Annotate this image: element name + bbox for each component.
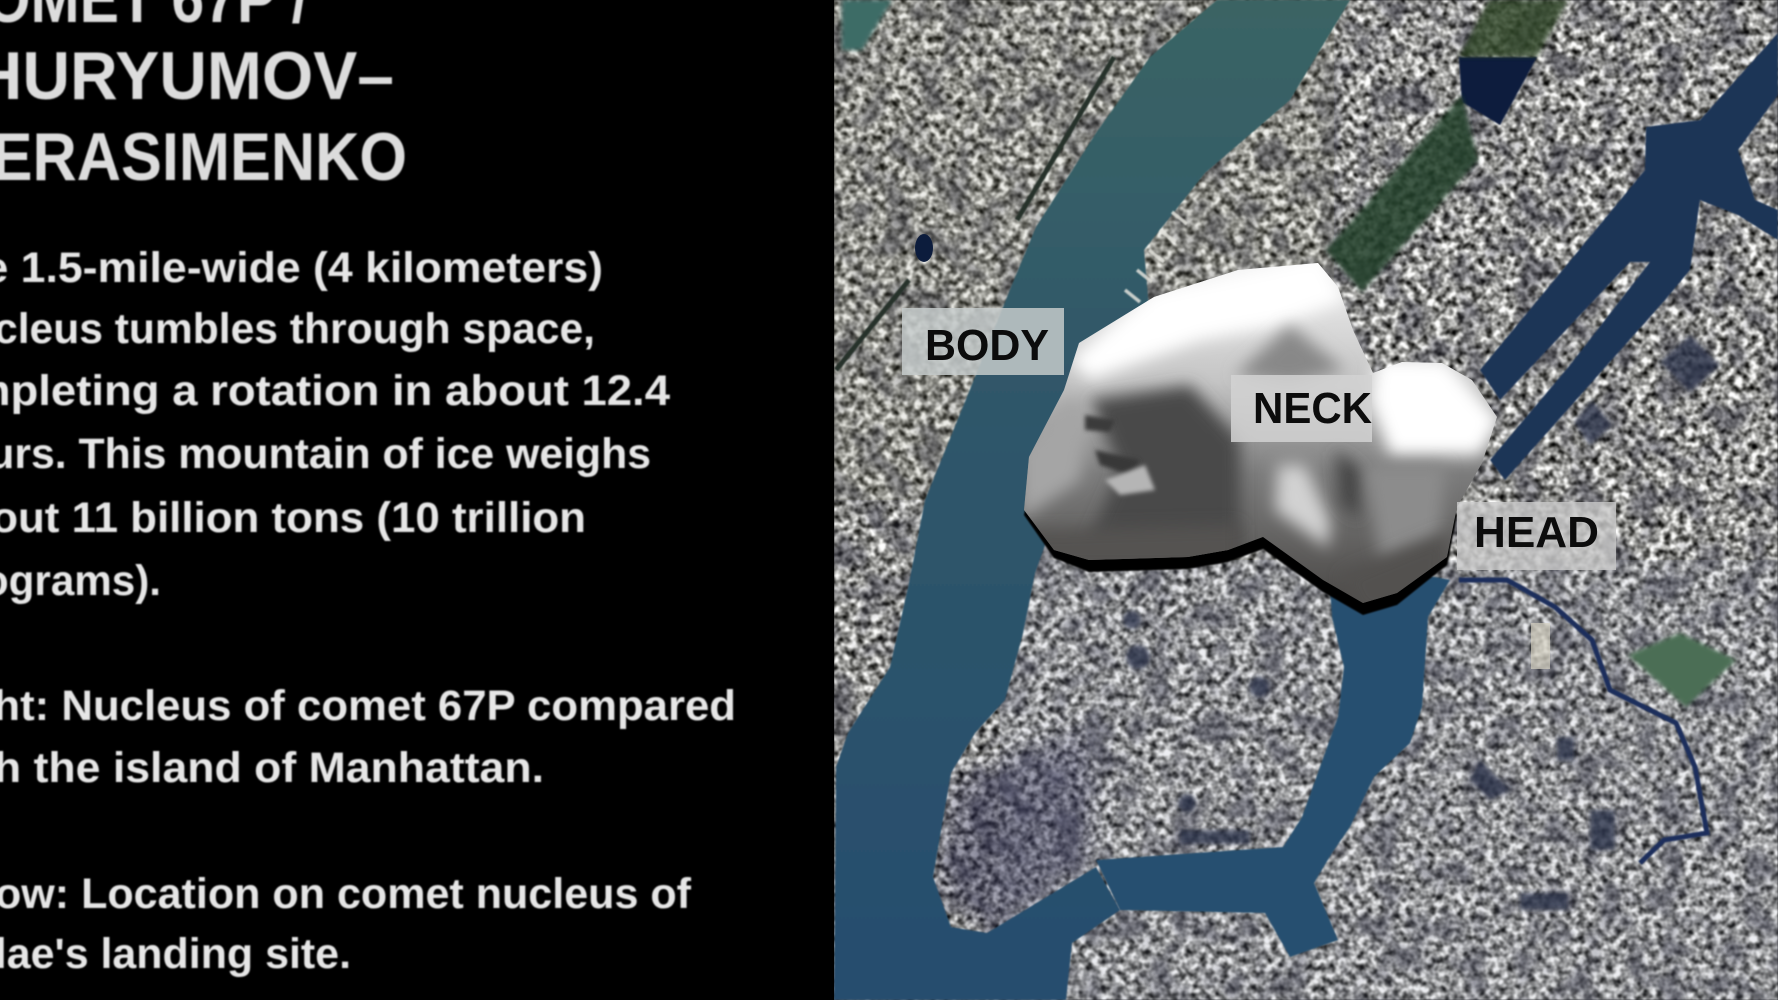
panel: text column xyxy=(0,0,736,978)
map: north park xyxy=(1459,0,1568,57)
map: Hudson River xyxy=(834,0,1350,1000)
map: teal corner xyxy=(842,0,892,50)
map: pond xyxy=(915,234,933,262)
map: bright strip xyxy=(1531,623,1550,669)
map: dark shoreline roads xyxy=(836,57,1114,370)
label: BODY xyxy=(902,308,1064,375)
label: BODY: BODY xyxy=(925,321,1049,370)
comet surface shading xyxy=(1020,255,1500,615)
map: Queens park xyxy=(1628,633,1736,707)
map: Reservoir xyxy=(1459,57,1537,125)
map: East River xyxy=(1096,570,1450,957)
text block: right caption xyxy=(0,682,736,792)
title xyxy=(0,0,407,195)
icon: comet nucleus 67P xyxy=(1020,255,1500,615)
text block: nucleus description xyxy=(0,244,670,605)
panel: satellite map of Manhattan xyxy=(834,0,1778,1000)
comet shadow xyxy=(1024,480,1457,615)
tint overlays xyxy=(834,0,1334,500)
label: HEAD: HEAD xyxy=(1474,508,1599,557)
map: Bronx River xyxy=(1459,580,1707,863)
label: NECK: NECK xyxy=(1253,384,1372,433)
map: piers xyxy=(1125,212,1187,302)
map: upper East River channels xyxy=(1480,33,1778,480)
label: NECK xyxy=(1231,375,1372,442)
label: HEAD xyxy=(1457,502,1616,570)
text block: below caption xyxy=(0,870,692,978)
comet body shape xyxy=(1024,263,1497,603)
map: dark city patches xyxy=(1123,335,1720,910)
map: Central Park xyxy=(1326,95,1478,292)
